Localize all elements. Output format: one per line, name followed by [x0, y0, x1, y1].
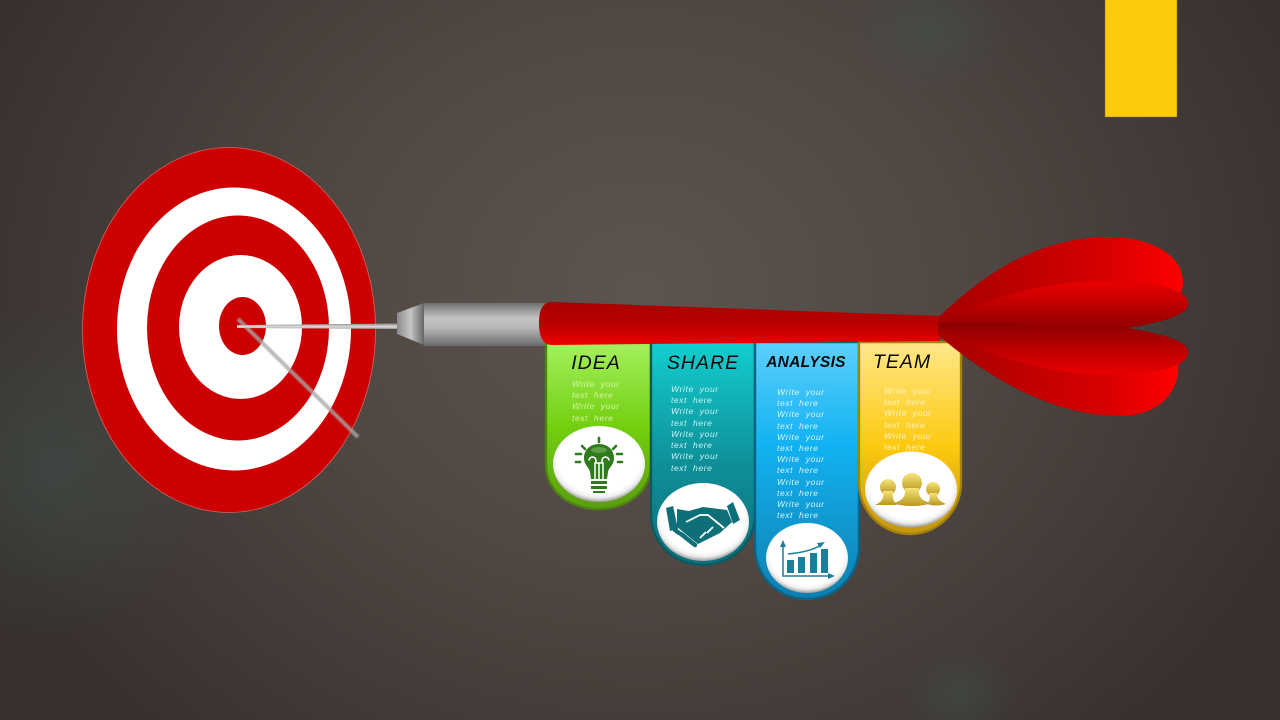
share text: text here [671, 418, 712, 428]
target board [82, 148, 376, 512]
analysis text: text here [777, 510, 818, 520]
analysis text: Write your [777, 454, 825, 464]
team text: Write your [884, 431, 932, 441]
idea text [572, 379, 620, 423]
analysis disc [766, 523, 848, 593]
analysis heading: ANALYSIS [765, 354, 846, 371]
panel: analysis [755, 342, 859, 599]
analysis text [777, 387, 825, 520]
yellow corner tab [1105, 0, 1177, 117]
team heading: TEAM [873, 351, 931, 373]
idea text: Write your [572, 379, 620, 389]
panel: team [859, 342, 961, 534]
idea text: text here [572, 390, 613, 400]
analysis text: text here [777, 421, 818, 431]
share text: text here [671, 440, 712, 450]
analysis text: text here [777, 488, 818, 498]
share text: Write your [671, 429, 719, 439]
team text: text here [884, 420, 925, 430]
share text: Write your [671, 384, 719, 394]
analysis text: text here [777, 465, 818, 475]
share text: Write your [671, 406, 719, 416]
team text: Write your [884, 408, 932, 418]
analysis text: Write your [777, 409, 825, 419]
analysis text: text here [777, 443, 818, 453]
analysis card [755, 342, 859, 599]
team text: text here [884, 397, 925, 407]
upper inner flight [938, 281, 1188, 332]
team text [884, 386, 932, 452]
idea card [546, 342, 651, 509]
share disc [657, 483, 749, 561]
dart needle shadow on target [238, 319, 358, 437]
idea heading: IDEA [571, 352, 621, 374]
panel: idea [546, 342, 651, 509]
dart needle [237, 324, 398, 329]
analysis text: Write your [777, 499, 825, 509]
analysis text: text here [777, 398, 818, 408]
dart barrel [424, 303, 548, 346]
analysis text: Write your [777, 432, 825, 442]
icon: handshake [666, 502, 740, 545]
idea text: Write your [572, 401, 620, 411]
idea disc [553, 426, 645, 502]
share text: text here [671, 463, 712, 473]
share heading: SHARE [667, 352, 739, 374]
share text [671, 384, 719, 473]
analysis text: Write your [777, 387, 825, 397]
dart flights [938, 237, 1188, 416]
analysis text: Write your [777, 477, 825, 487]
icon: light bulb [576, 438, 622, 493]
lower inner flight [938, 322, 1188, 375]
team text: text here [884, 442, 925, 452]
dart cone tip [397, 303, 424, 345]
team card [859, 342, 961, 534]
icon: team people [875, 473, 946, 506]
share text: Write your [671, 451, 719, 461]
dart shaft [539, 302, 940, 345]
lower outer flight [938, 328, 1178, 416]
panel: share [651, 342, 755, 565]
icon: bar chart [780, 540, 835, 579]
team text: Write your [884, 386, 932, 396]
idea text: text here [572, 413, 613, 423]
upper outer flight [938, 237, 1183, 325]
share card [651, 342, 755, 565]
team disc [865, 452, 957, 528]
share text: text here [671, 395, 712, 405]
